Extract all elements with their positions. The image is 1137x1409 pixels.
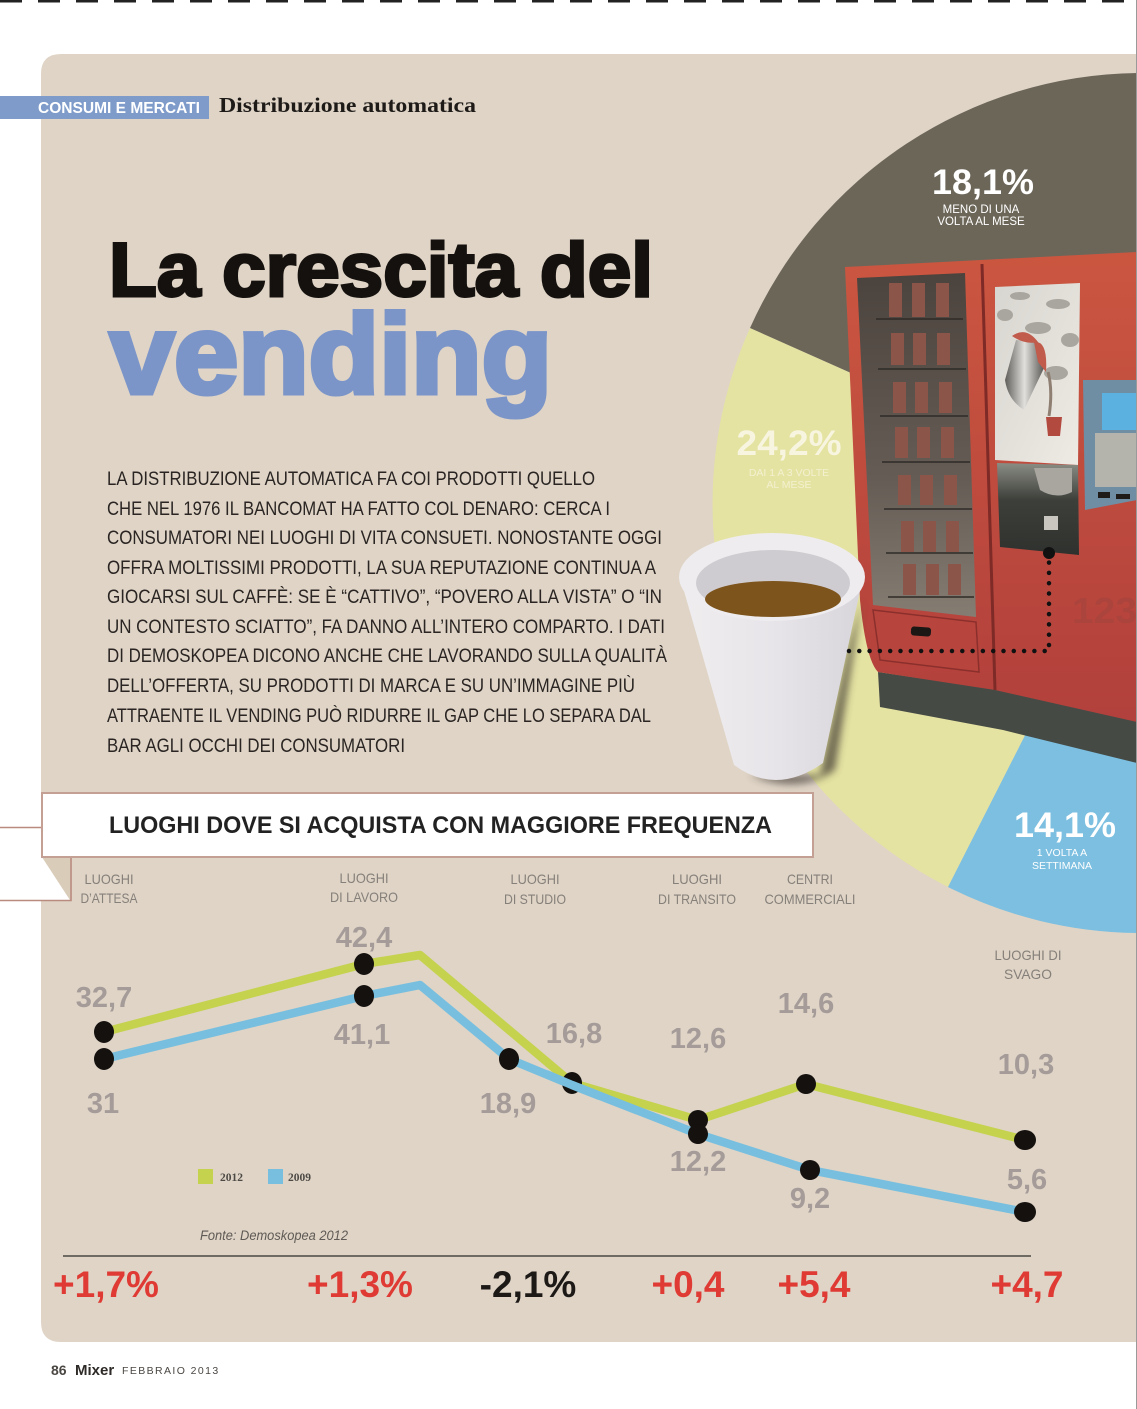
pie label: 18,1%: MENO DI UNA [943,204,1020,216]
title [109,228,653,417]
intro text block: CHE NEL 1976 IL BANCOMAT HA FATTO COL DENARO: CERCA I [107,499,610,520]
glass window [857,273,976,617]
pie label: 24,2%: 24,2% [736,424,842,463]
chart category labels: DI TRANSITO [658,891,736,907]
chart title banner: LUOGHI DOVE SI ACQUISTA CON MAGGIORE FREQUENZA [109,812,772,839]
chart value labels: 18,9 [480,1088,536,1120]
page footer: 86 [51,1362,67,1378]
white folded ribbon tail [0,828,71,900]
title: La crescita del [109,228,653,313]
slice: 24,2% yellow [713,328,1137,887]
cup body [684,591,860,780]
drawer [873,610,979,672]
section tag: Distribuzione automatica [219,93,477,117]
cup pattern in picture [997,292,1079,380]
shelves and cans [876,283,974,597]
chart title banner [42,793,813,857]
legend [198,1169,311,1184]
chart category labels [80,870,1062,982]
right page edge [1136,0,1137,1409]
dotted connector [849,547,1055,651]
chart value labels: 5,6 [1007,1164,1047,1196]
intro text block: CONSUMATORI NEI LUOGHI DI VITA CONSUETI. NONOSTANTE OGGI [107,528,662,549]
chart category labels: LUOGHI [84,871,134,887]
line: 2012 [104,955,1025,1140]
chart value labels: 14,6 [778,988,834,1020]
intro text block: BAR AGLI OCCHI DEI CONSUMATORI [107,736,405,757]
pie label: 14,1% [1014,806,1116,872]
chart value labels: 16,8 [546,1018,602,1050]
vending machine illustration [845,252,1137,763]
chart value labels: 12,2 [670,1146,726,1178]
blue line over middle dot [546,1074,600,1096]
pie label: 14,1%: SETTIMANA [1032,860,1092,872]
intro text block: DI DEMOSKOPEA DICONO ANCHE CHE LAVORANDO SULLA QUALITÀ [107,646,667,667]
chart value labels: 9,2 [790,1183,830,1215]
change row: -2,1% [480,1264,576,1305]
machine base [878,672,1137,763]
legend: 2009 [288,1172,311,1184]
chart value labels: 31 [87,1088,119,1120]
chart value labels: 10,3 [998,1049,1054,1081]
change row: +5,4 [777,1264,851,1305]
control panel [1083,380,1137,510]
pie label: 18,1%: 18,1% [932,163,1034,202]
intro text block: DELL’OFFERTA, SU PRODOTTI DI MARCA E SU UN’IMMAGINE PIÙ [107,675,635,697]
machine number: 123 [1072,590,1137,631]
intro text block: UN CONTESTO SCIATTO”, FA DANNO ALL’INTERO COMPARTO. I DATI [107,617,665,638]
pie label: 18,1% [932,163,1034,228]
chart value labels: 42,4 [336,922,392,954]
legend: 2012 [220,1172,243,1184]
coffee picture panel [995,283,1080,465]
page footer: FEBBRAIO 2013 [122,1365,220,1377]
change row: +1,3% [307,1264,413,1305]
chart value labels: 32,7 [76,982,132,1014]
slice: 18,1% dark [750,73,1137,503]
section tag [0,93,477,119]
dispenser opening [997,463,1079,555]
slice: 14,1% blue [948,503,1137,933]
line chart [94,953,1036,1222]
intro text block: OFFRA MOLTISSIMI PRODOTTI, LA SUA REPUTAZIONE CONTINUA A [107,558,656,579]
intro text block: GIOCARSI SUL CAFFÈ: SE È “CATTIVO”, “POVERO ALLA VISTA” O “IN [107,587,662,608]
intro text block [107,469,667,757]
source note: Fonte: Demoskopea 2012 [200,1228,348,1243]
chart value labels: 41,1 [334,1019,390,1051]
coffee [705,581,841,617]
chart category labels: DI STUDIO [504,891,566,907]
chart category labels: LUOGHI [672,871,722,887]
page footer [51,1362,220,1379]
line: 2009 [104,985,1025,1212]
coffee cup [679,533,865,784]
chart category labels: LUOGHI [510,871,560,887]
cup rim [679,533,865,621]
chart category labels: DI LAVORO [330,889,398,905]
section tag: CONSUMI E MERCATI [38,100,200,117]
change row: +0,4 [651,1264,725,1305]
change row: +4,7 [990,1264,1064,1305]
chart category labels: LUOGHI [340,870,388,886]
change row: +1,7% [53,1264,159,1305]
coffee pot [1005,332,1062,436]
cup shadow [750,600,862,784]
pie label: 18,1%: VOLTA AL MESE [937,216,1025,228]
machine body [845,252,1137,722]
title: vending [110,292,552,417]
chart category labels: LUOGHI DI [994,947,1062,963]
door divider [982,264,995,690]
pie chart [713,73,1137,933]
chart category labels: D’ATTESA [80,890,138,906]
pie label: 24,2% [736,424,842,491]
chart value labels [76,922,1054,1215]
pie label: 24,2%: AL MESE [766,479,812,491]
pie label: 14,1%: 1 VOLTA A [1037,847,1087,859]
chart category labels: SVAGO [1004,966,1052,982]
chart value labels: 12,6 [670,1023,726,1055]
pie label: 14,1%: 14,1% [1014,806,1116,845]
change row [53,1256,1064,1305]
intro text block: ATTRAENTE IL VENDING PUÒ RIDURRE IL GAP CHE LO SEPARA DAL [107,705,651,727]
top dashed border [0,0,1137,2]
intro text block: LA DISTRIBUZIONE AUTOMATICA FA COI PRODOTTI QUELLO [107,469,595,490]
data points [94,953,1036,1222]
chart category labels: CENTRI [787,871,833,887]
page footer: Mixer [75,1362,114,1379]
pie label: 24,2%: DAI 1 A 3 VOLTE [749,467,829,479]
chart category labels: COMMERCIALI [764,891,856,907]
